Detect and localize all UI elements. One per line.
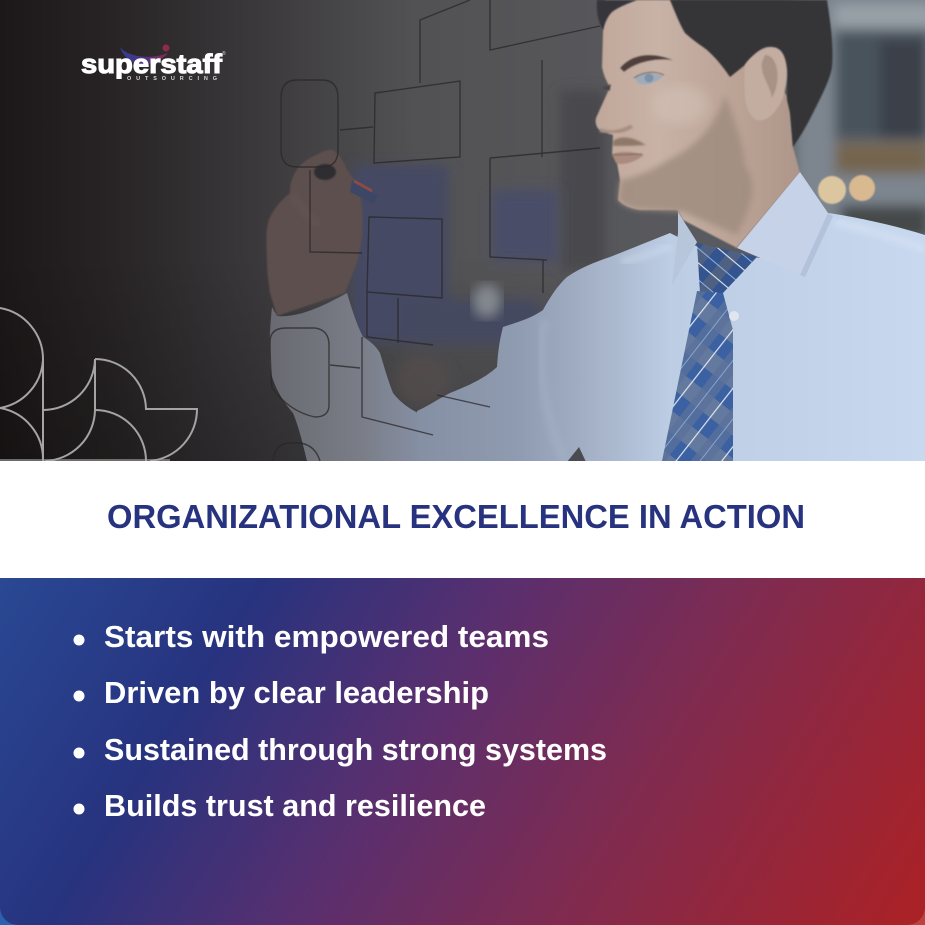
- shirt button: [729, 311, 739, 321]
- logo: OUTSOURCING: [127, 76, 217, 82]
- brow: [620, 55, 673, 72]
- lips: [612, 152, 644, 164]
- beard shadow: [618, 95, 753, 235]
- panel: gradient bullet list: [0, 578, 925, 925]
- org chart lines on glass: [270, 0, 600, 461]
- logo: ®: [222, 50, 226, 57]
- neck and face: [596, 0, 800, 248]
- ear: [744, 47, 787, 120]
- title: ORGANIZATIONAL EXCELLENCE IN ACTION: [107, 498, 805, 535]
- blurred office background: [560, 0, 925, 270]
- moustache: [613, 137, 646, 146]
- decorative line pattern: [0, 308, 197, 461]
- photo: man drawing an org chart on glass: [0, 0, 925, 462]
- bullet 1: Starts with empowered teams: [104, 619, 549, 654]
- hand holding marker: [266, 150, 378, 316]
- head: [596, 0, 800, 248]
- marker: [314, 164, 336, 180]
- tie: [662, 243, 757, 461]
- eye: [635, 74, 663, 84]
- bullet 2: Driven by clear leadership: [104, 675, 489, 710]
- blue glass patches: [352, 165, 558, 405]
- logo: superstaff: [81, 49, 223, 79]
- cheek highlight: [660, 88, 706, 122]
- nose shadow: [600, 126, 632, 132]
- far eye: [602, 84, 611, 91]
- hair: [597, 0, 833, 147]
- bullet 3: Sustained through strong systems: [104, 732, 607, 767]
- bokeh lights: [818, 175, 875, 204]
- collar: [672, 172, 833, 285]
- shirt: [417, 213, 925, 461]
- forearm sleeve: [270, 293, 420, 461]
- dark gap under arm: [568, 447, 586, 461]
- title band: [0, 461, 925, 578]
- bullet 4: Builds trust and resilience: [104, 788, 486, 823]
- blurred light spot: [473, 284, 501, 318]
